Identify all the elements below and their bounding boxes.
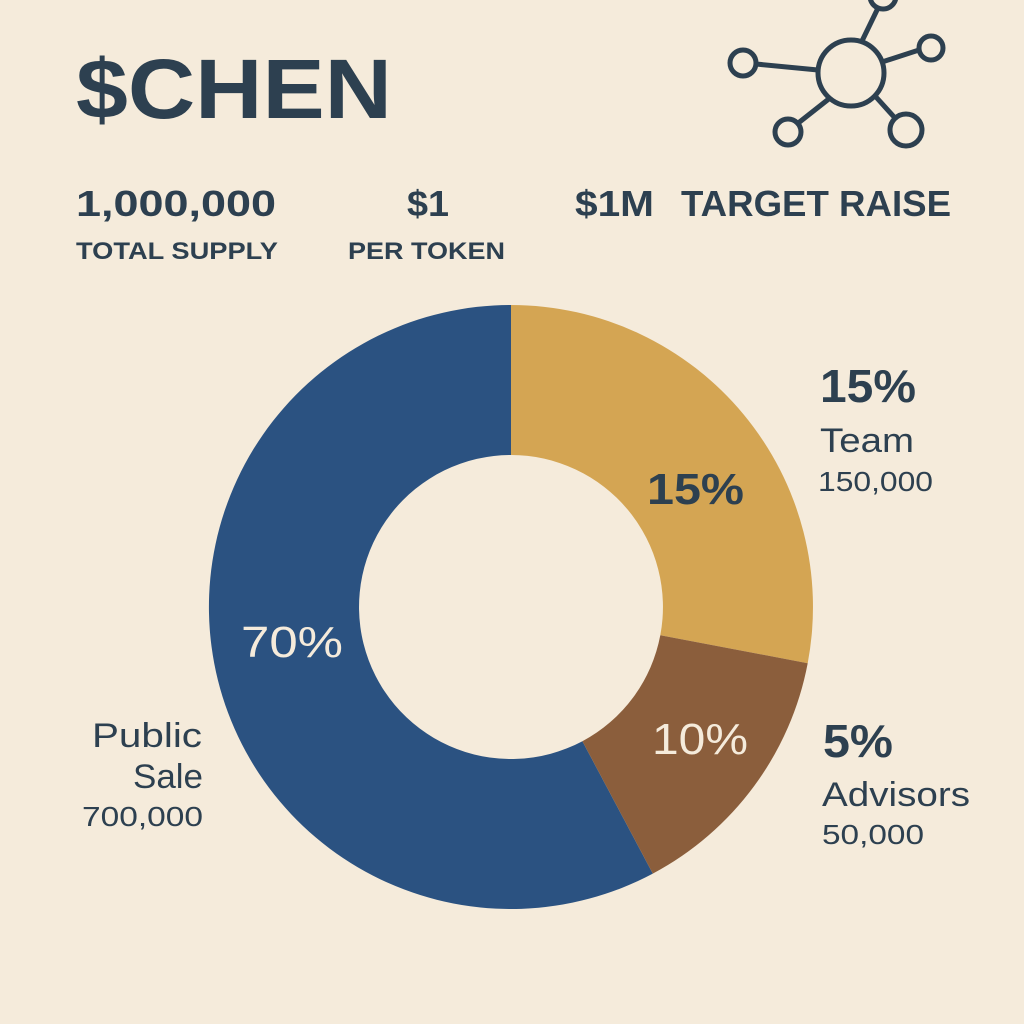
segment: public sale <box>209 305 653 909</box>
segment: advisors <box>582 635 808 874</box>
icon: network <box>730 0 943 146</box>
donut chart <box>209 305 813 909</box>
label: team: Team <box>820 422 914 460</box>
stat: total supply: 1,000,000 <box>76 183 276 224</box>
title: $CHEN <box>76 42 392 136</box>
donut chart: 70% <box>241 618 343 667</box>
label: team: 150,000 <box>818 466 933 497</box>
stat: target raise: TARGET RAISE <box>681 183 951 224</box>
label: advisors <box>822 715 970 850</box>
label: public sale <box>82 717 203 832</box>
label: advisors: 50,000 <box>822 819 924 850</box>
donut chart: 15% <box>647 465 744 514</box>
segment: team <box>511 305 813 663</box>
label: public sale: Public <box>92 717 202 755</box>
stat: total supply <box>76 183 278 265</box>
stat: target raise: $1M <box>575 183 654 224</box>
donut chart: 10% <box>652 715 748 764</box>
label: public sale: Sale <box>133 758 203 796</box>
stat: total supply: TOTAL SUPPLY <box>76 238 278 265</box>
label: team: 15% <box>820 360 916 412</box>
label: team <box>818 360 933 497</box>
stat: price: PER TOKEN <box>348 238 505 265</box>
label: advisors: 5% <box>823 715 893 767</box>
stat: price <box>348 183 505 265</box>
label: public sale: 700,000 <box>82 801 203 832</box>
label: advisors: Advisors <box>822 776 970 814</box>
stat: price: $1 <box>407 183 449 224</box>
